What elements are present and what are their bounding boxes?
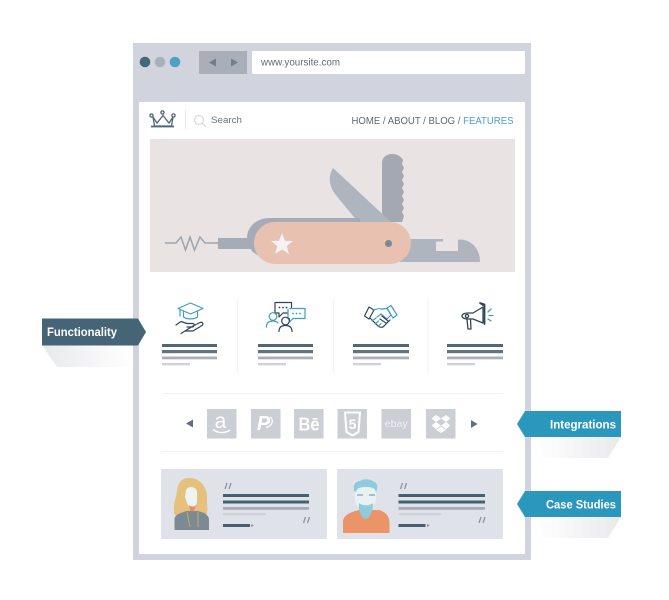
carousel arrow left xyxy=(186,420,193,428)
logo: paypal: P xyxy=(257,413,271,435)
portrait: bearded man in orange sweater xyxy=(343,479,390,533)
feature text placeholder 3 xyxy=(353,344,409,365)
carousel arrow right xyxy=(471,420,478,428)
portrait: woman with blonde hair xyxy=(174,478,209,530)
address bar: www.yoursite.com xyxy=(260,58,340,68)
quote marks and testimonial placeholder xyxy=(223,483,310,527)
search box: Search xyxy=(211,115,242,126)
navigation menu: HOME / ABOUT / BLOG / FEATURES xyxy=(352,116,514,127)
icon: handshake xyxy=(364,306,397,327)
illustration: swiss army knife xyxy=(165,154,480,264)
case study card 2 xyxy=(337,469,503,539)
callout: integrations: Integrations xyxy=(550,420,616,432)
browser window xyxy=(133,43,531,560)
logo: ebay: ebay xyxy=(385,418,408,430)
logo: paypal xyxy=(251,409,280,438)
callout: integrations xyxy=(517,411,621,458)
feature text placeholder 4 xyxy=(447,344,503,365)
icon: graduation cap in hand xyxy=(176,303,203,334)
icon: crown logo xyxy=(150,111,175,126)
feature text placeholder 2 xyxy=(258,344,313,365)
callout: functionality xyxy=(42,318,146,367)
logo: amazon: a xyxy=(215,410,227,433)
logo: behance xyxy=(294,409,324,438)
address bar xyxy=(252,51,525,74)
logo: amazon xyxy=(207,409,236,438)
back and forward buttons xyxy=(199,51,247,74)
search box xyxy=(186,110,242,129)
icon: megaphone xyxy=(462,303,493,329)
case study card 1 xyxy=(161,469,327,539)
logo: html5 xyxy=(338,409,367,438)
feature column dividers xyxy=(238,300,428,372)
window control dots xyxy=(140,57,180,67)
hero banner xyxy=(150,139,515,272)
feature text placeholder 1 xyxy=(162,344,217,365)
icon: people with speech bubbles xyxy=(266,302,305,332)
logo: behance: Bē xyxy=(298,414,320,434)
integration section rules xyxy=(162,394,503,452)
logo: dropbox xyxy=(426,409,456,438)
callout: case studies xyxy=(517,491,621,538)
callout: case studies: Case Studies xyxy=(546,500,616,512)
quote marks and testimonial placeholder xyxy=(398,483,485,527)
logo: ebay xyxy=(382,409,411,438)
callout: functionality: Functionality xyxy=(47,327,118,339)
logo: html5: 5 xyxy=(349,416,357,432)
